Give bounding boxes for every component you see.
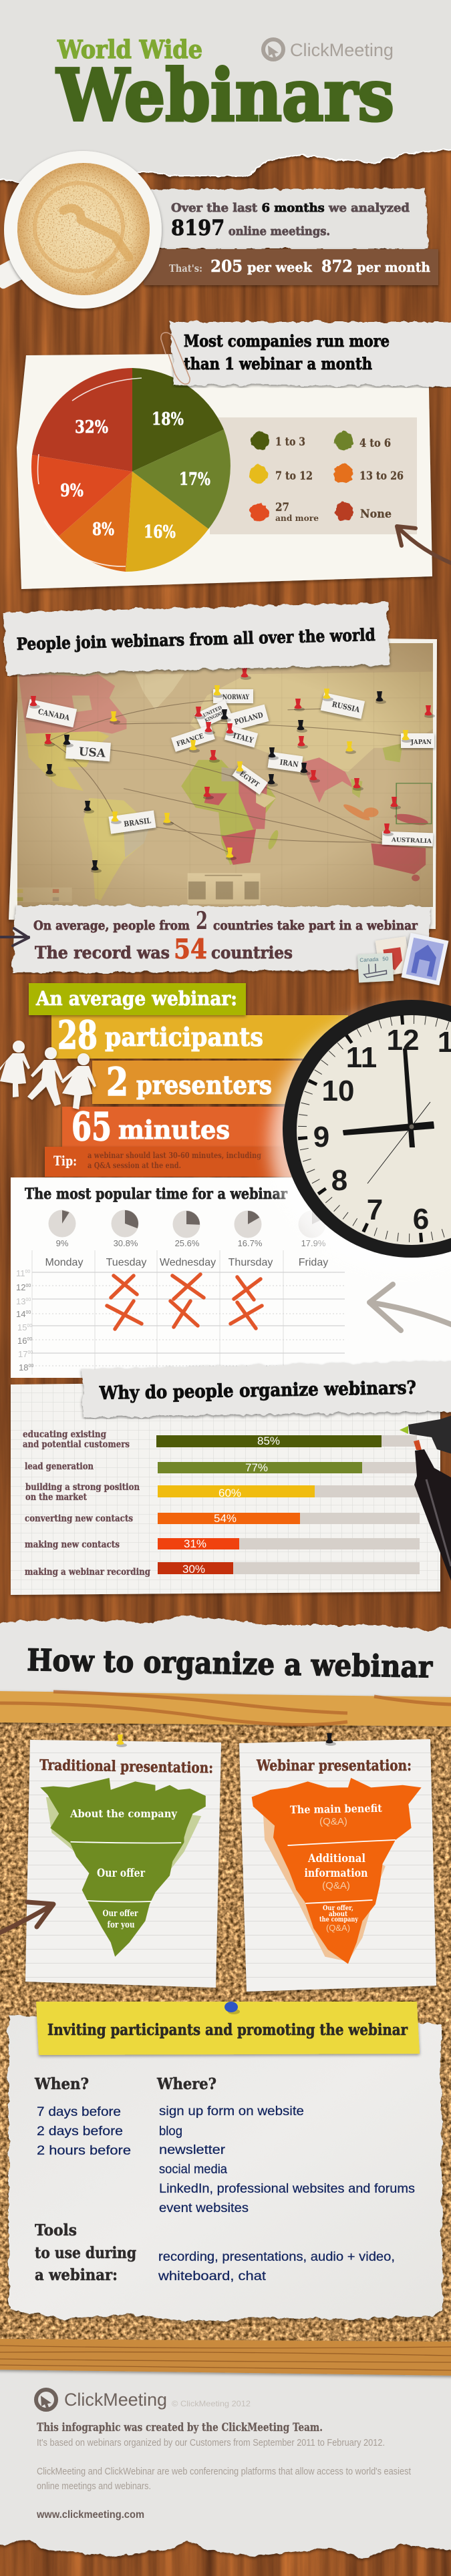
bar: 28 participants xyxy=(51,1013,348,1059)
calendar grid: 00 xyxy=(27,1324,32,1328)
pie chart: 32% xyxy=(75,417,108,437)
credits text: This infographic was created by the ClickMeeting Team. xyxy=(37,2421,323,2434)
day share pies: 9% xyxy=(56,1238,69,1248)
panel: world map xyxy=(0,602,448,985)
column: when xyxy=(34,2075,131,2158)
bar chart: on the market xyxy=(25,1492,87,1503)
note sheet xyxy=(25,1740,221,1988)
pie chart: 8% xyxy=(92,520,114,540)
clock: 9 xyxy=(313,1121,329,1153)
column: tools: to use during xyxy=(35,2244,136,2262)
funnel: webinar: (Q&A) xyxy=(326,1923,350,1933)
legend box xyxy=(210,417,417,534)
calendar grid: Wednesday xyxy=(160,1257,216,1268)
panel: traditional presentation xyxy=(25,1734,221,1988)
panel: companies pie chart xyxy=(17,322,451,589)
column: tools: Tools xyxy=(35,2221,77,2239)
calendar grid: 13 xyxy=(16,1296,25,1306)
panel: why organize webinars xyxy=(11,1361,451,1595)
country labels: AUSTRALIA xyxy=(391,837,432,845)
country labels: RUSSIA xyxy=(331,700,361,715)
heading bar: an average webinar xyxy=(29,983,246,1015)
bar chart: 54% xyxy=(214,1512,237,1525)
country labels: JAPAN xyxy=(410,739,432,746)
pie chart: 17% xyxy=(179,470,210,490)
icon: red marker xyxy=(414,1440,451,1590)
heading strip: Why do people organize webinars? xyxy=(99,1378,416,1404)
logo: ClickMeeting xyxy=(36,2390,251,2410)
calendar grid: 00 xyxy=(27,1337,32,1342)
arrow: brown xyxy=(0,1902,53,1934)
grid paper xyxy=(11,1380,440,1595)
country labels: POLAND xyxy=(233,711,265,727)
calendar grid: Monday xyxy=(45,1257,83,1268)
icon: paperclip xyxy=(161,333,190,384)
cross marks xyxy=(107,1274,262,1329)
heading bar: an average webinar: An average webinar: xyxy=(35,987,237,1010)
bar: 65 minutes xyxy=(62,1104,285,1149)
column: when: When? xyxy=(34,2075,89,2093)
column: where: LinkedIn, professional websites and forums xyxy=(159,2182,415,2196)
torn sheet xyxy=(9,2016,442,2322)
column: where: blog xyxy=(159,2125,182,2139)
icon: black pin xyxy=(325,1733,336,1746)
pie chart xyxy=(31,368,231,572)
country labels: NORWAY xyxy=(222,694,250,701)
heading strip: most companies xyxy=(170,322,451,386)
country labels xyxy=(26,689,434,846)
calendar grid: Thursday xyxy=(229,1257,273,1268)
column: where: social media xyxy=(159,2163,227,2177)
calendar grid: 00 xyxy=(25,1310,31,1315)
heading strip: people join: People join webinars from all over the world xyxy=(16,625,375,654)
column: where: event websites xyxy=(159,2201,249,2215)
country labels: USA xyxy=(78,745,106,761)
bar: tip: a webinar should last 30-60 minutes, including xyxy=(88,1151,261,1160)
strip: countries statistics: On average, people from xyxy=(33,918,190,933)
country labels: KINGDOM xyxy=(204,709,227,723)
bar: per week and per month: 872 per month xyxy=(321,256,430,276)
country labels: BRASIL xyxy=(123,816,152,829)
icon: coffee cup xyxy=(0,151,162,309)
column: where: newsletter xyxy=(159,2143,226,2157)
credits text: It's based on webinars organized by our Customers from September 2011 to February 2012. xyxy=(37,2438,385,2448)
country labels: IRAN xyxy=(279,758,299,769)
panel: title header xyxy=(0,0,451,182)
column: when: 7 days before xyxy=(37,2105,121,2119)
funnel: webinar: the company xyxy=(319,1915,359,1923)
arrow xyxy=(397,526,451,564)
funnel: webinar: Our offer, xyxy=(323,1904,353,1912)
icon: green marker xyxy=(400,1415,451,1455)
calendar grid: Friday xyxy=(299,1257,328,1268)
logo: ClickMeeting: © ClickMeeting 2012 xyxy=(172,2399,251,2408)
icon: postage stamps: Canada xyxy=(359,956,379,963)
heading strip: most companies: Most companies run more xyxy=(184,331,390,351)
heading: The most popular time for a webinar xyxy=(25,1185,287,1203)
calendar grid: 00 xyxy=(25,1284,31,1288)
day share pies: 30.8% xyxy=(114,1238,138,1248)
bar chart: 77% xyxy=(245,1461,268,1474)
calendar grid xyxy=(16,1250,345,1374)
icon: postage stamps xyxy=(357,933,448,985)
calendar grid: 11 xyxy=(16,1268,25,1278)
bar chart: 85% xyxy=(257,1435,280,1447)
funnel: webinar: The main benefit xyxy=(290,1802,383,1816)
credits text: www.clickmeeting.com xyxy=(36,2509,144,2521)
panel: most popular time calendar xyxy=(11,1177,451,1378)
calendar grid: 00 xyxy=(28,1364,33,1368)
bar chart: building a strong position xyxy=(25,1482,140,1493)
heading: Webinar presentation: xyxy=(256,1757,412,1775)
clock: 8 xyxy=(331,1164,347,1197)
calendar grid: 12 xyxy=(16,1282,25,1292)
calendar grid: 17 xyxy=(18,1349,27,1359)
funnel: webinar: information xyxy=(305,1867,367,1880)
clock xyxy=(270,1000,451,1273)
legend box: 27 xyxy=(275,501,289,514)
cork board xyxy=(0,1720,451,2348)
bar chart: 30% xyxy=(182,1563,205,1576)
bar: per week and per month: 205 per week xyxy=(210,256,313,276)
calendar grid: 00 xyxy=(25,1298,31,1302)
bar chart: 60% xyxy=(218,1487,241,1499)
clock: 11 xyxy=(346,1041,377,1074)
heading: World Wide: World Wide xyxy=(57,35,202,64)
bar: tip: Tip: xyxy=(53,1153,77,1169)
bar chart: making new contacts xyxy=(25,1539,120,1550)
text: 8197 online meetings: 8197 online meetings. xyxy=(171,215,330,240)
heading strip: people join xyxy=(3,602,390,675)
bar: 2 presenters: 2 xyxy=(106,1059,128,1105)
column: when: 2 hours before xyxy=(37,2144,131,2158)
strip: countries statistics: 54 xyxy=(174,934,207,965)
wood plank: bottom xyxy=(0,2339,451,2376)
country labels: UNITED xyxy=(202,705,222,718)
calendar grid: Tuesday xyxy=(106,1257,146,1268)
day share pies xyxy=(48,1210,326,1248)
column: where: Where? xyxy=(156,2075,216,2093)
bar: 2 presenters: presenters xyxy=(136,1070,272,1100)
bar chart: lead generation xyxy=(25,1461,94,1472)
pie chart: 9% xyxy=(60,481,84,501)
icon: yellow pin xyxy=(116,1734,127,1747)
legend box: 13 to 26 xyxy=(359,470,404,483)
credits text: ClickMeeting and ClickWebinar are web conferencing platforms that allow access to world's easiest xyxy=(37,2466,411,2477)
funnel: webinar: (Q&A) xyxy=(322,1880,350,1891)
panel: inviting participants xyxy=(9,2002,442,2322)
bar: tip xyxy=(45,1147,291,1177)
bar chart: making a webinar recording xyxy=(25,1567,150,1578)
column: where: sign up form on website xyxy=(159,2104,304,2119)
clock: 12 xyxy=(387,1024,419,1057)
funnel: webinar: (Q&A) xyxy=(319,1816,347,1827)
day share pies: 17.9% xyxy=(301,1238,326,1248)
country labels: FRANCE xyxy=(176,733,205,748)
funnel: traditional: Our offer xyxy=(103,1909,138,1919)
strip: countries statistics: countries xyxy=(211,943,293,962)
column: tools: recording, presentations, audio + video, xyxy=(158,2250,395,2264)
credits text xyxy=(36,2421,411,2521)
bar: 2 presenters xyxy=(92,1059,302,1105)
text: six months analyzed: Over the last 6 months we analyzed xyxy=(171,201,410,215)
bar: 28 participants: 28 xyxy=(57,1013,98,1058)
legend box: None xyxy=(360,508,392,521)
world map xyxy=(17,643,433,907)
logo: ClickMeeting: ClickMeeting xyxy=(64,2390,167,2410)
map frame xyxy=(9,634,437,929)
panel: average webinar xyxy=(0,983,348,1177)
country labels: ITALY xyxy=(232,731,255,745)
bar: per week and per month: That's: xyxy=(169,262,202,274)
funnel: webinar: about xyxy=(329,1910,347,1918)
icon: postage stamps: 50 xyxy=(382,956,389,962)
panel: footer xyxy=(0,2339,451,2558)
heading strip xyxy=(82,1361,451,1417)
legend box: 4 to 6 xyxy=(359,437,391,450)
legend box: 7 to 12 xyxy=(275,470,313,483)
credits text: online meetings and webinars. xyxy=(37,2481,151,2492)
strip: countries statistics: The record was xyxy=(35,943,170,962)
bar: 65 minutes: 65 xyxy=(71,1104,112,1149)
strip: countries statistics: countries take part in a webinar xyxy=(213,918,418,933)
clock: 7 xyxy=(367,1193,383,1226)
bar: 65 minutes: minutes xyxy=(118,1115,230,1145)
bar chart xyxy=(23,1429,420,1578)
bar: tip: a Q&A session at the end. xyxy=(88,1161,181,1170)
column: when: 2 days before xyxy=(37,2125,123,2139)
strip: countries statistics xyxy=(13,906,430,972)
strip: countries statistics: 2 xyxy=(196,907,208,935)
bar chart: 31% xyxy=(184,1537,206,1550)
column: where xyxy=(156,2075,415,2215)
calendar grid: 00 xyxy=(27,1350,33,1355)
clock: 10 xyxy=(322,1075,354,1107)
bar chart: and potential customers xyxy=(23,1439,130,1450)
column: tools xyxy=(35,2221,395,2284)
sticky note heading xyxy=(36,2002,420,2055)
funnel: traditional: Our offer xyxy=(97,1867,146,1880)
panel: analysis summary xyxy=(144,188,438,285)
country labels: CANADA xyxy=(37,707,71,723)
column: tools: whiteboard, chat xyxy=(158,2269,267,2283)
icon: blue pin xyxy=(224,2002,240,2014)
pie chart: 18% xyxy=(152,409,184,429)
pie chart: 16% xyxy=(144,522,176,542)
heading: Traditional presentation: xyxy=(39,1757,213,1777)
calendar grid: 18 xyxy=(19,1362,28,1372)
icon: paper people xyxy=(0,1041,96,1109)
wood plank: top xyxy=(0,1691,451,1726)
country labels: EGYPT xyxy=(238,770,261,789)
legend box: and more xyxy=(275,514,319,523)
note sheet xyxy=(239,1739,436,1992)
paper sheet xyxy=(17,352,432,589)
bar chart: converting new contacts xyxy=(25,1513,133,1524)
day share pies: 16.7% xyxy=(238,1238,263,1248)
panel: how to organize header xyxy=(0,1615,451,1700)
bar: 28 participants: participants xyxy=(105,1022,263,1052)
day share pies: 25.6% xyxy=(175,1238,200,1248)
calendar grid: 15 xyxy=(17,1322,27,1332)
funnel: traditional xyxy=(40,1778,206,1957)
column: tools: a webinar: xyxy=(35,2266,118,2284)
logo: ClickMeeting: ClickMeeting xyxy=(290,40,394,60)
funnel: webinar: Additional xyxy=(307,1852,365,1865)
calendar grid: 14 xyxy=(16,1309,25,1319)
heading strip: most companies: than 1 webinar a month xyxy=(184,354,372,373)
clock: 6 xyxy=(413,1203,429,1236)
arrow xyxy=(0,928,29,946)
arrow: grey xyxy=(369,1284,451,1330)
funnel: traditional: About the company xyxy=(69,1807,178,1820)
calendar grid: 00 xyxy=(25,1270,30,1274)
funnel: traditional: for you xyxy=(107,1920,135,1930)
calendar grid: 16 xyxy=(17,1336,27,1346)
bar: per week and per month xyxy=(144,249,438,285)
panel: webinar presentation xyxy=(239,1733,436,1992)
heading: Webinars: Webinars xyxy=(56,54,394,138)
bar chart: educating existing xyxy=(23,1429,106,1440)
legend box: 1 to 3 xyxy=(275,435,305,449)
funnel: webinar xyxy=(252,1778,422,1964)
map pins xyxy=(29,667,435,873)
